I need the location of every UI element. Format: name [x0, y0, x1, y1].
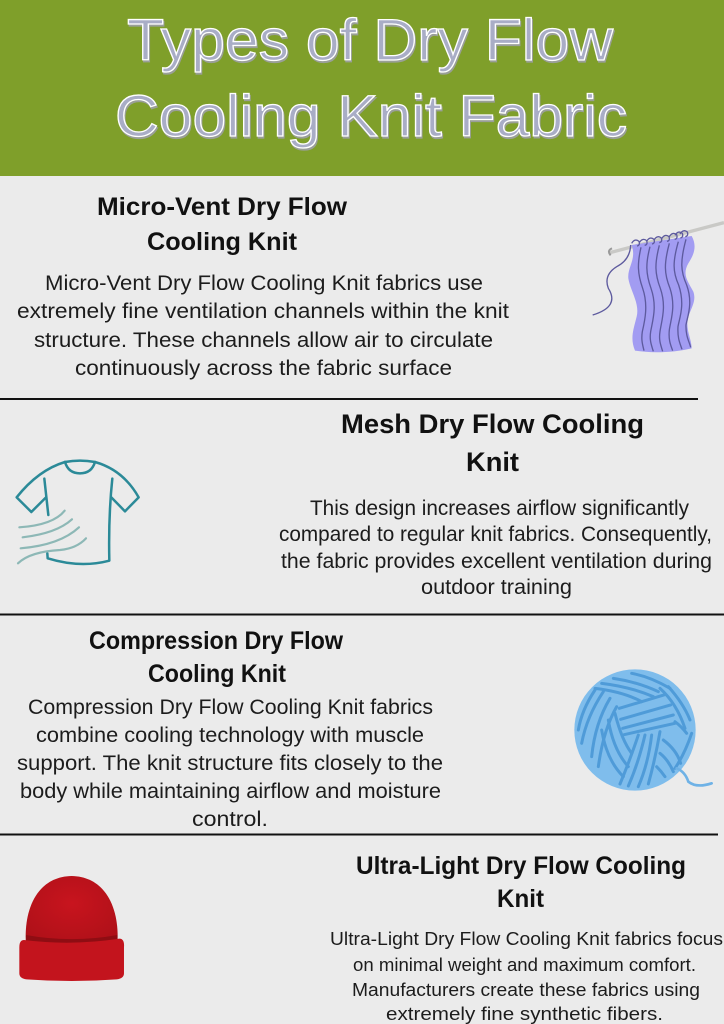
icon: ball of yarn: [574, 669, 712, 791]
icon: red beanie: [19, 876, 124, 981]
text block: compression: body while maintaining airflow and moisture: [20, 780, 441, 803]
text block: micro-vent: structure. These channels allow air to circulate: [34, 329, 493, 352]
heading: mesh: [341, 409, 644, 477]
icon: knitting swatch on needle: [593, 223, 724, 352]
text block: ultra-light: on minimal weight and maximum comfort.: [353, 954, 696, 975]
text block: ultra-light: Ultra-Light Dry Flow Cooling Knit fabrics focus: [330, 928, 723, 949]
text block: compression: support. The knit structure fits closely to the: [17, 752, 443, 775]
heading: ultra-light: Knit: [497, 885, 545, 913]
text block: mesh: This design increases airflow significantly: [310, 497, 689, 520]
heading: ultra-light: Ultra-Light Dry Flow Cooling: [356, 852, 686, 880]
text block: mesh: [279, 497, 712, 599]
text block: mesh: the fabric provides excellent ventilation during: [281, 550, 712, 573]
icon: t-shirt with airflow: [17, 461, 139, 564]
title: Types of Dry Flow: [127, 8, 614, 73]
text block: ultra-light: Manufacturers create these fabrics using: [352, 979, 700, 1000]
text block: micro-vent: Micro-Vent Dry Flow Cooling Knit fabrics use: [45, 272, 483, 295]
text block: compression: control.: [192, 808, 268, 831]
heading: micro-vent: Micro-Vent Dry Flow: [97, 193, 348, 221]
text block: micro-vent: continuously across the fabric surface: [75, 357, 452, 380]
heading: ultra-light: [356, 852, 686, 913]
text block: compression: [17, 696, 443, 831]
title: Cooling Knit Fabric: [115, 84, 627, 149]
text block: compression: combine cooling technology with muscle: [36, 724, 424, 747]
heading: compression: Cooling Knit: [148, 660, 287, 688]
heading: micro-vent: [97, 193, 348, 256]
text block: mesh: outdoor training: [421, 576, 572, 599]
text block: mesh: compared to regular knit fabrics. Consequently,: [279, 523, 712, 546]
heading: compression: Compression Dry Flow: [89, 627, 344, 655]
heading: compression: [89, 627, 344, 688]
heading: micro-vent: Cooling Knit: [147, 228, 298, 256]
text block: ultra-light: extremely fine synthetic fibers.: [386, 1003, 663, 1024]
panel: compression: [17, 627, 712, 831]
text block: compression: Compression Dry Flow Cooling Knit fabrics: [28, 696, 433, 719]
heading: mesh: Mesh Dry Flow Cooling: [341, 409, 644, 439]
panel: mesh: [17, 409, 712, 599]
title: [115, 8, 627, 149]
text block: micro-vent: extremely fine ventilation channels within the knit: [17, 300, 509, 323]
panel: ultra-light: [19, 852, 723, 1024]
heading: mesh: Knit: [466, 447, 519, 477]
text block: ultra-light: [330, 928, 723, 1024]
panel: micro-vent: [17, 193, 724, 380]
panel: title banner: [0, 0, 724, 176]
text block: micro-vent: [17, 272, 509, 380]
